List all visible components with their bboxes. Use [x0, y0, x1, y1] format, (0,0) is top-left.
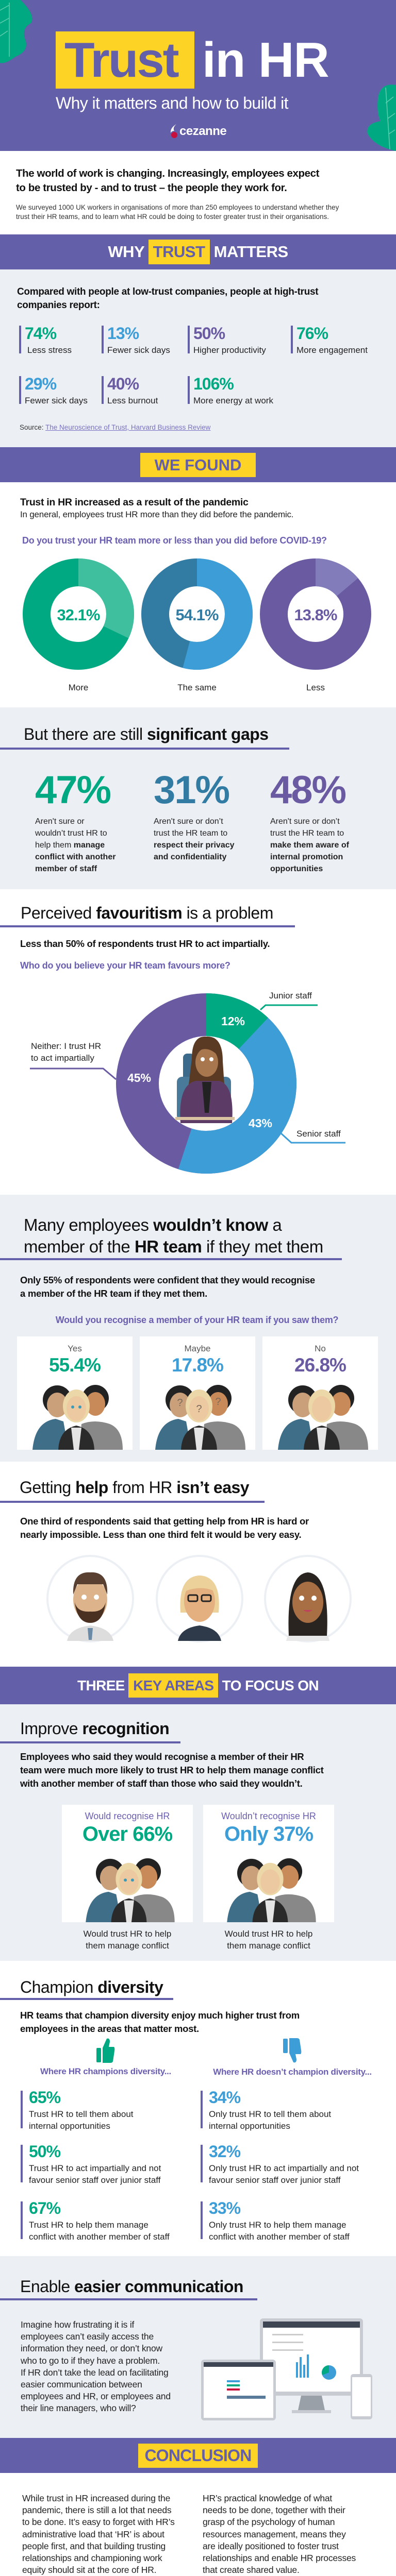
text: conclusion right: resources management, means they	[203, 2529, 346, 2539]
chart: favouritism donut: 43%	[249, 1116, 272, 1130]
heading: Enable easier communication	[20, 2277, 243, 2296]
stat 13%: 13%	[107, 324, 139, 343]
icon: thumbs down	[283, 2038, 301, 2063]
stat 74%: 74%	[25, 324, 56, 343]
card: no: 26.8%	[294, 1354, 346, 1376]
stat 47%: help them manage	[35, 841, 105, 850]
stat 47%	[35, 768, 116, 873]
stat 50%: 50%	[29, 2142, 60, 2161]
text: help	[20, 1516, 309, 1540]
title: Trust	[64, 32, 178, 88]
paragraph: employees and HR, or employees and	[21, 2391, 171, 2401]
stat 33%: Only trust HR to help them manage	[209, 2220, 346, 2230]
chart: donuts covid: More	[69, 683, 88, 692]
card: wouldn't recognise: Wouldn’t recognise HR	[221, 1811, 316, 1821]
lead text: Employees who said they would recognise a member of their HR	[20, 1751, 304, 1762]
caption right	[225, 1929, 312, 1951]
stat 29%: Fewer sick days	[25, 396, 88, 405]
banner: why trust matters	[0, 234, 396, 269]
stat 47%: wouldn’t trust HR to	[35, 829, 107, 838]
stat 50%	[21, 2145, 196, 2183]
illustration: people group unsure: ?	[196, 1403, 202, 1415]
chart: donuts covid: The same	[177, 683, 217, 692]
chart: favouritism donut: 12%	[221, 1014, 245, 1028]
stat 48%: make them aware of	[270, 841, 349, 850]
stat 13%: Fewer sick days	[107, 345, 170, 355]
lead text: companies report:	[17, 300, 100, 311]
stat 31%: and confidentiality	[154, 853, 226, 861]
illustration: people group unsure: ?	[177, 1397, 183, 1409]
source: Source: The Neuroscience of Trust, Harvard Business Review	[20, 423, 210, 431]
panel: recognise HR	[0, 1195, 396, 1462]
paragraph: If HR don’t take the lead on facilitating	[21, 2367, 169, 2378]
stat 29%	[19, 375, 88, 405]
stat 31%: respect their privacy	[154, 841, 235, 850]
lead text: HR teams that champion diversity enjoy much higher trust from	[20, 2010, 300, 2021]
chart: donuts covid: 13.8%	[294, 606, 337, 624]
text: help: One third of respondents said that getting help from HR is hard or	[20, 1516, 309, 1527]
stat 47%: conflict with another	[35, 853, 116, 861]
card: wouldn't recognise	[203, 1805, 334, 1922]
stat 50%: Higher productivity	[193, 345, 266, 355]
illustration: people group faceless	[227, 1858, 316, 1922]
text: pandemic: In general, employees trust HR more than they did before the pandemic.	[20, 510, 293, 519]
panel: easier communication	[0, 2256, 396, 2438]
stat 48%: Aren't sure or don’t	[270, 817, 340, 826]
lead text: employees in the areas that matter most.	[20, 2023, 199, 2034]
paragraph: their line managers, who will?	[21, 2403, 136, 2413]
stat 76%: 76%	[296, 324, 328, 343]
header banner	[0, 0, 396, 151]
illustration: woman	[175, 1037, 235, 1123]
stat 32%	[201, 2145, 378, 2183]
caption right: them manage conflict	[227, 1941, 310, 1951]
stat 48%: 48%	[270, 768, 345, 812]
stat 50%	[188, 324, 266, 355]
intro text: The world of work is changing. Increasingly, employees expect	[16, 167, 319, 179]
chart: favouritism donut: Neither: I trust HR	[31, 1041, 101, 1051]
paragraph: who to go to if they have a problem.	[21, 2355, 160, 2366]
stat 32%: 32%	[209, 2142, 240, 2161]
heading: favouritism: Perceived favouritism is a problem	[21, 904, 273, 922]
chart: favouritism donut: 45%	[127, 1071, 151, 1084]
text: impartially: Less than 50% of respondents trust HR to act impartially.	[20, 938, 270, 949]
stat 50%: 50%	[193, 324, 225, 343]
text: conclusion left: pandemic, there is still a lot that needs	[22, 2505, 171, 2515]
banner: conclusion	[0, 2438, 396, 2473]
lead text	[20, 2010, 300, 2034]
stat 13%	[102, 324, 170, 355]
illustration: people group faceless	[278, 1385, 368, 1450]
lead text	[17, 286, 319, 311]
stat 106%	[188, 375, 273, 405]
text: conclusion right: that create shared value.	[203, 2565, 300, 2575]
chart: donuts covid: 32.1%	[57, 606, 100, 624]
lead text: Compared with people at low-trust companies, people at high-trust	[17, 286, 318, 297]
paragraph: easier communication between	[21, 2379, 142, 2389]
stat 48%	[270, 768, 349, 873]
question: covid: Do you trust your HR team more or less than you did before COVID-19?	[22, 535, 327, 546]
stat 76%: More engagement	[296, 345, 368, 355]
card: wouldn't recognise: Only 37%	[224, 1823, 313, 1845]
card: maybe: Maybe	[184, 1344, 211, 1353]
illustration: three faces in circles	[46, 1555, 352, 1642]
stat 67%: Trust HR to help them manage	[29, 2220, 148, 2230]
caption right: Would trust HR to help	[225, 1929, 312, 1939]
stat 47%: 47%	[35, 768, 110, 812]
stat 33%: conflict with another member of staff	[209, 2232, 350, 2242]
paragraph	[21, 2319, 196, 2415]
illustration: people group unsure	[155, 1385, 245, 1450]
card: no	[262, 1336, 378, 1450]
stat 32%: favour senior staff over junior staff	[209, 2175, 340, 2185]
heading: champion diversity: Champion diversity	[20, 1978, 163, 1996]
banner: why trust matters: WHY MATTERS	[108, 243, 288, 261]
stat 65%: Trust HR to tell them about	[29, 2109, 134, 2119]
title: in HR	[202, 32, 329, 88]
lead text: with another member of staff than those who said they wouldn’t.	[20, 1778, 302, 1789]
chart: favouritism donut: Senior staff	[296, 1129, 341, 1139]
question: favours: Who do you believe your HR team favours more?	[20, 960, 230, 971]
card: yes: Yes	[68, 1344, 82, 1353]
text: conclusion left: relationships and championing work	[22, 2553, 162, 2563]
card: would recognise: Would recognise HR	[85, 1811, 170, 1821]
heading: getting help: Getting help from HR isn’t easy	[20, 1478, 249, 1497]
text: conclusion right	[203, 2493, 381, 2576]
paragraph: employees can’t easily access the	[21, 2331, 154, 2342]
stat 106%: 106%	[193, 375, 234, 393]
paragraph: information they need, or don’t know	[21, 2343, 162, 2353]
stat 65%	[21, 2091, 196, 2129]
lead text: team were much more likely to trust HR to help them manage conflict	[20, 1765, 323, 1775]
text: conclusion left: equity should sit at the core of HR.	[22, 2565, 156, 2575]
banner: why trust matters: TRUST	[153, 243, 205, 261]
panel: significant gaps	[0, 707, 396, 889]
text: conclusion right: are ideally positioned to foster trust	[203, 2541, 339, 2551]
text: help: nearly impossible. Less than one third felt it would be very easy.	[20, 1529, 301, 1540]
stat 50%: Trust HR to act impartially and not	[29, 2163, 161, 2173]
stat 31%: 31%	[154, 768, 229, 812]
stat 32%: Only trust HR to act impartially and not	[209, 2163, 359, 2173]
stat 40%	[102, 375, 158, 405]
text: conclusion left	[22, 2493, 197, 2576]
chart: favouritism donut	[30, 991, 345, 1174]
stat 34%: 34%	[209, 2088, 240, 2107]
stat 76%	[291, 324, 368, 355]
card: would recognise	[62, 1805, 193, 1922]
text: pandemic	[20, 497, 293, 519]
stat 29%: 29%	[25, 375, 56, 393]
stat 33%: 33%	[209, 2199, 240, 2217]
stat 31%: trust the HR team to	[154, 829, 227, 838]
card: yes: 55.4%	[49, 1354, 101, 1376]
card: maybe: 17.8%	[172, 1354, 223, 1376]
panel: improve recognition	[0, 1704, 396, 1961]
text: pandemic: Trust in HR increased as a result of the pandemic	[20, 497, 249, 508]
subtitle: Why it matters and how to build it	[56, 94, 288, 112]
stats: diversity comparison	[20, 2090, 381, 2240]
stat 65%: internal opportunities	[29, 2121, 110, 2131]
intro text: trust their HR teams, and to learn what HR could be doing to foster greater trust in their organisations.	[16, 212, 329, 221]
heading	[24, 1215, 323, 1256]
text: conclusion right: needs to be done, together with their	[203, 2505, 345, 2515]
stat 67%: conflict with another member of staff	[29, 2232, 170, 2242]
stat 34%: internal opportunities	[209, 2121, 290, 2131]
illustration: people group happy	[86, 1858, 175, 1922]
text: conclusion left: people first, and that building trusting	[22, 2541, 166, 2551]
stat 67%: 67%	[29, 2199, 60, 2217]
intro text: to be trusted by - and to trust – the people they work for.	[16, 182, 287, 194]
heading: Many employees wouldn’t know a	[24, 1215, 282, 1234]
label: doesn't champion: Where HR doesn’t champion diversity...	[213, 2067, 372, 2077]
banner: we found	[0, 447, 396, 482]
caption left: them manage conflict	[86, 1941, 169, 1951]
text: conclusion left: While trust in HR increased during the	[22, 2493, 170, 2503]
stat 31%	[154, 768, 235, 861]
stat 74%: Less stress	[27, 345, 72, 355]
intro text	[16, 167, 339, 221]
paragraph: Imagine how frustrating it is if	[21, 2319, 134, 2330]
caption left	[84, 1929, 171, 1951]
card: no: No	[315, 1344, 326, 1353]
text: conclusion right: relationships and enable HR processes	[203, 2553, 356, 2563]
stat 34%	[201, 2091, 376, 2129]
text: conclusion left: to be done. It’s easy to forget with HR’s	[22, 2517, 175, 2527]
heading: Improve recognition	[20, 1719, 169, 1738]
stat 31%: Aren't sure or don’t	[154, 817, 223, 826]
intro text: We surveyed 1000 UK workers in organisations of more than 250 employees to understand whether they	[16, 204, 339, 211]
stat 48%: internal promotion	[270, 853, 343, 861]
illustration: devices	[200, 2318, 373, 2421]
banner: we found: WE FOUND	[155, 456, 241, 474]
icon: thumbs up	[96, 2038, 114, 2063]
title	[56, 31, 329, 89]
chart: donuts covid	[23, 558, 371, 692]
stat 47%: Aren't sure or	[35, 817, 85, 826]
lead text: a member of the HR team if they met them.	[20, 1288, 207, 1299]
stat 40%: Less burnout	[107, 396, 158, 405]
lead text: Only 55% of respondents were confident that they would recognise	[20, 1275, 315, 1285]
illustration: people group happy	[32, 1385, 123, 1450]
stat 106%: More energy at work	[193, 396, 273, 405]
stat 67%	[21, 2201, 199, 2240]
caption left: Would trust HR to help	[84, 1929, 171, 1939]
callout lines	[260, 1005, 318, 1010]
panel: why trust matters stats	[0, 269, 396, 447]
stat 34%: Only trust HR to tell them about	[209, 2109, 331, 2119]
stat 50%: favour senior staff over junior staff	[29, 2175, 160, 2185]
stat 33%	[201, 2201, 378, 2240]
logo: cezanne: cezanne	[179, 124, 226, 138]
stat 40%: 40%	[107, 375, 139, 393]
banner: three key areas	[0, 1667, 396, 1704]
heading: member of the HR team if they met them	[24, 1237, 323, 1256]
stat 65%: 65%	[29, 2088, 60, 2107]
banner: three key areas: KEY AREAS	[133, 1677, 213, 1693]
card: would recognise: Over 66%	[82, 1823, 172, 1845]
card: yes	[17, 1336, 133, 1450]
heading: But there are still significant gaps	[24, 725, 269, 743]
lead text	[20, 1751, 324, 1789]
illustration: people group unsure: ?	[215, 1396, 221, 1408]
icon: leaf top left	[0, 0, 32, 63]
banner: three key areas: THREE TO FOCUS ON	[77, 1677, 319, 1693]
text: conclusion right: HR’s practical knowledge of what	[203, 2493, 332, 2503]
stat 48%: opportunities	[270, 865, 323, 873]
question: Would you recognise a member of your HR team if you saw them?	[56, 1315, 338, 1325]
text: conclusion right: grasp of the psychology of human	[203, 2517, 335, 2527]
chart: favouritism donut: to act impartially	[31, 1053, 94, 1063]
chart: favouritism donut: Junior staff	[269, 991, 312, 1001]
stat 48%: trust the HR team to	[270, 829, 344, 838]
stat 47%: member of staff	[35, 865, 97, 873]
label: champions: Where HR champions diversity...	[40, 2066, 171, 2076]
banner: conclusion: CONCLUSION	[144, 2446, 252, 2465]
chart: donuts covid: Less	[306, 683, 325, 692]
lead text	[20, 1275, 315, 1299]
text: conclusion left: administrative load that ‘HR’ is about	[22, 2529, 164, 2539]
icon: leaf right	[367, 84, 396, 151]
card: maybe	[140, 1336, 255, 1450]
stat 74%	[19, 324, 72, 355]
chart: donuts covid: 54.1%	[176, 606, 219, 624]
